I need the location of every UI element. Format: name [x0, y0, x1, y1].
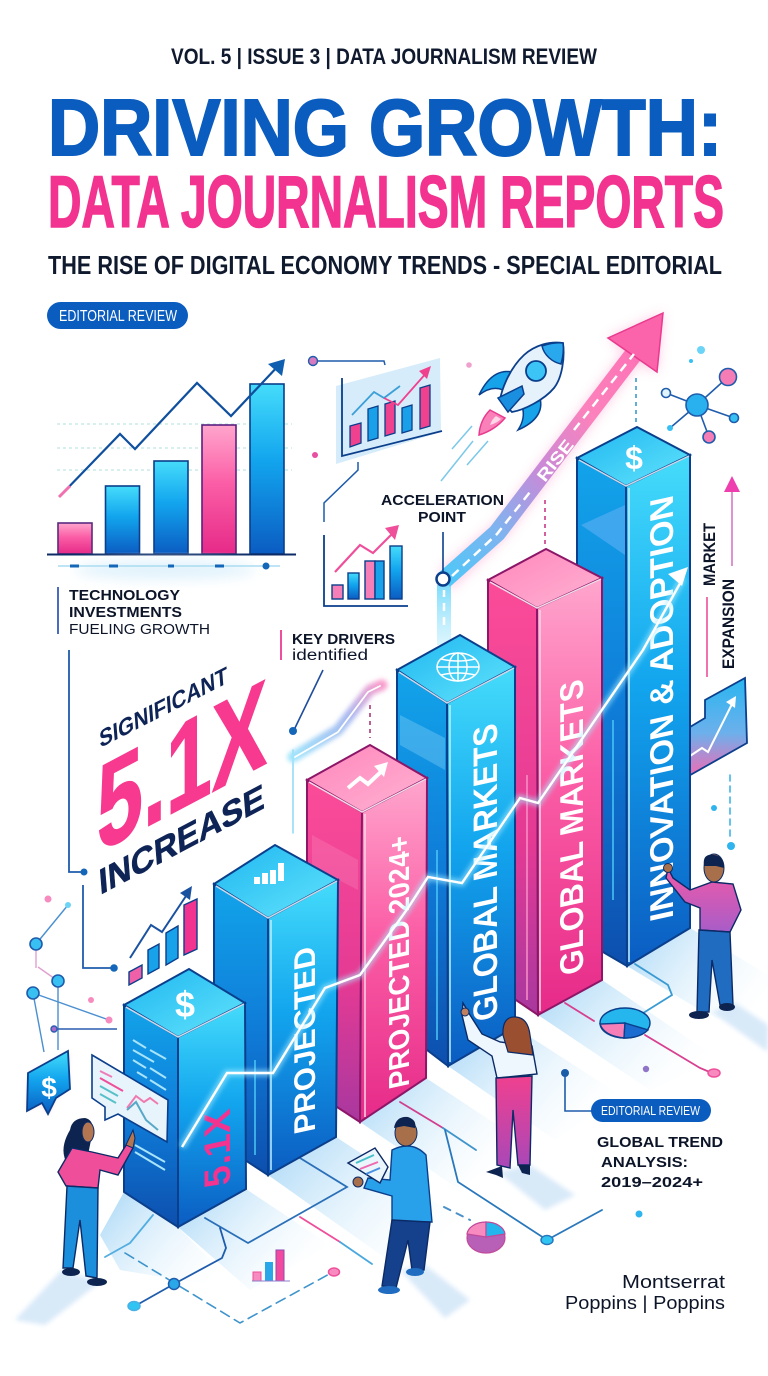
rise arrow: RISE	[533, 436, 578, 485]
text: global trend analysis: GLOBAL TREND	[597, 1134, 723, 1151]
floor connector lines	[105, 775, 735, 1323]
small chart: lower left	[129, 886, 197, 985]
label: acceleration point	[381, 492, 504, 572]
left network nodes	[27, 896, 117, 1052]
icon: dollar speech bubble	[27, 1051, 70, 1114]
market expansion label: MARKET	[700, 522, 719, 586]
floating chart panel	[92, 1055, 168, 1142]
small chart: acceleration side	[324, 525, 408, 606]
icon: rocket	[441, 342, 564, 481]
credits: Poppins | Poppins	[565, 1293, 725, 1313]
callout: 5.1X increase: SIGNIFICANT	[98, 662, 229, 754]
credits: Montserrat	[622, 1272, 725, 1292]
credits	[565, 1272, 725, 1313]
text: technology investments: TECHNOLOGY	[69, 587, 180, 604]
bar 2: projected	[214, 845, 338, 1175]
bar 6: innovation and adoption	[577, 427, 690, 966]
top-left bar chart	[47, 359, 296, 580]
editorial review badge lower: EDITORIAL REVIEW	[601, 1103, 701, 1118]
market expansion label: EXPANSION	[719, 579, 738, 669]
person: man right	[664, 854, 741, 1019]
icon: dollar speech bubble: $	[41, 1072, 57, 1103]
bar 1: 5.1X	[124, 969, 246, 1227]
person: woman centre	[461, 1003, 537, 1178]
issue line: VOL. 5 | ISSUE 3 | DATA JOURNALISM REVIEW	[171, 44, 597, 69]
text: key drivers: KEY DRIVERS	[292, 631, 395, 648]
glow streak above bar 3	[293, 685, 382, 833]
bracket line to increase callout	[69, 650, 118, 972]
rise arrow	[436, 313, 663, 645]
key drivers leader	[289, 670, 323, 735]
icon: dollar on bar 6: $	[625, 440, 643, 476]
bar 2 label: PROJECTED	[289, 943, 322, 1137]
bar 6 label: INNOVATION & ADOPTION	[644, 492, 681, 924]
bar 5: global markets pink	[488, 549, 602, 1015]
callout: 5.1X increase: 5.1X	[97, 652, 267, 879]
text: global trend analysis	[597, 1134, 723, 1191]
icon: globe	[437, 653, 479, 681]
text: key drivers	[280, 630, 395, 664]
bar 5 label: GLOBAL MARKETS	[554, 676, 591, 978]
text: technology investments	[57, 587, 210, 638]
icon: network	[662, 346, 738, 443]
text: technology investments: INVESTMENTS	[69, 604, 182, 621]
callout: 5.1X increase	[97, 652, 267, 902]
floor shadows	[15, 928, 768, 1325]
editorial review badge lower	[561, 1069, 711, 1122]
bar 4 label: GLOBAL MARKETS	[467, 720, 505, 1025]
text: key drivers: identified	[292, 647, 368, 664]
badge: editorial review	[47, 302, 188, 329]
bar 3 label: PROJECTED 2024+	[383, 832, 416, 1092]
icon: expansion tile	[685, 678, 747, 778]
person: man with tablet	[348, 1117, 432, 1294]
text: technology investments: FUELING GROWTH	[69, 621, 210, 638]
label: acceleration point: POINT	[418, 509, 466, 526]
icon: pie chart lower	[467, 1222, 505, 1253]
market expansion label	[700, 476, 740, 677]
person: woman left	[58, 1118, 135, 1286]
icon: trend arrow on bar 3	[348, 770, 383, 788]
callout: 5.1X increase: INCREASE	[97, 776, 266, 902]
text: global trend analysis: 2019–2024+	[601, 1174, 703, 1191]
dashed markers	[370, 378, 636, 738]
icon: mini bars on bar 2	[254, 863, 284, 884]
label: acceleration point: ACCELERATION	[381, 492, 504, 509]
icon: mini bar chart	[252, 1250, 290, 1281]
text: global trend analysis: ANALYSIS:	[601, 1154, 688, 1171]
growth line across bars	[182, 567, 688, 1147]
small chart: centre top	[308, 356, 442, 522]
icon: dollar on bar 1: $	[175, 984, 195, 1025]
bar 1 label: 5.1X	[196, 1106, 238, 1191]
icon: pie chart upper	[600, 1008, 650, 1038]
bar 3: projected 2024+	[307, 745, 427, 1122]
badge: editorial review: EDITORIAL REVIEW	[59, 308, 177, 325]
bar 4: global markets blue	[397, 635, 515, 1066]
